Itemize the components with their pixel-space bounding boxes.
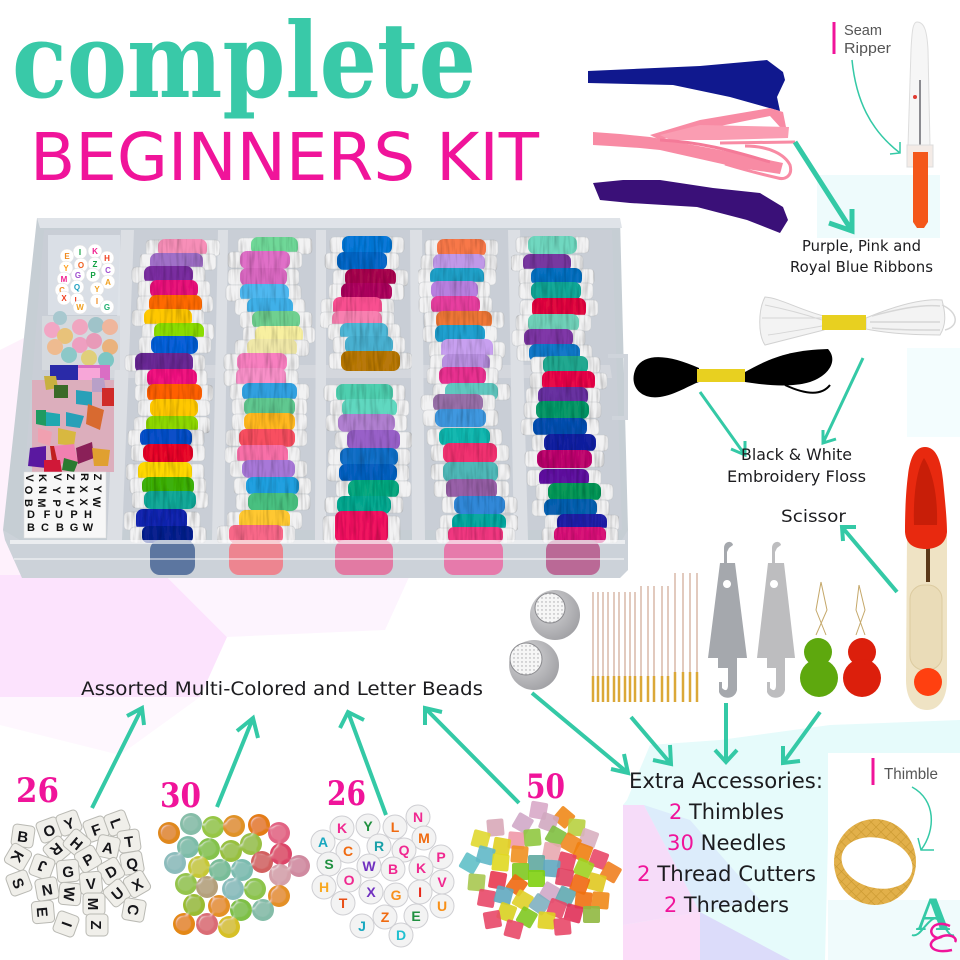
beads: black and white letter cubes: F [89,821,104,840]
letter cube beads in box: V [51,473,63,481]
beads: black and white letter cubes [3,809,152,938]
arrow: ribbons to label [795,142,852,231]
beads: black and white letter cubes: E [33,906,50,918]
beads: black and white letter cubes: Z [87,920,104,930]
ribbon: purple [593,180,788,233]
panel: gold thimble: Thimble [884,766,938,783]
title: beginners kit: BEGINNERS KIT [30,119,540,196]
arrow: seam ripper pointer [852,60,900,154]
beads: white round letter beads: P [436,849,446,865]
bag with white letter beads: A [105,278,111,287]
white embroidery floss [760,297,955,345]
bag with white letter beads: Z [93,260,98,269]
bag with white letter beads: X [61,294,67,303]
beads: white round letter beads: X [366,884,376,900]
bag with white letter beads: Y [63,264,69,273]
scissors [905,447,947,710]
bag with white letter beads: K [92,247,98,256]
silver thimbles [509,590,580,690]
beads: black and white letter cubes: P [80,850,97,870]
letter cube beads in box: F [44,509,51,521]
letter cube beads in box: V [63,499,75,507]
bag with white letter beads: W [76,303,84,312]
beads: white round letter beads: T [339,895,348,911]
letter cube beads in box: Y [91,485,103,493]
beads: iridescent pearls [158,813,310,938]
box latch [608,356,626,418]
beads: black and white letter cubes: T [123,833,135,852]
beads: white round letter beads: C [343,843,353,859]
needles [593,573,697,702]
letter cube beads in box: U [55,509,63,521]
accessories list: 2 Thimbles [669,800,784,824]
beads: white round letter beads: G [391,887,402,903]
panel: gold thimble [828,753,960,960]
letter cube beads in box [22,472,106,538]
beads: black and white letter cubes: J [36,856,49,875]
beads: white round letter beads: O [344,872,355,888]
ribbon: royal blue [588,60,785,111]
letter cube beads in box: W [83,522,94,534]
label: ribbons: Purple, Pink and [802,237,921,255]
floss column 3 [320,236,412,543]
beads: black and white letter cubes: W [59,886,78,902]
letter cube beads in box: H [64,486,76,494]
beads: black and white letter cubes: D [103,862,121,882]
bag with white letter beads: C [59,286,65,295]
letter cube beads in box: C [41,522,49,534]
beads: black and white letter cubes: X [129,875,146,895]
thread cutter 1 [708,542,747,698]
compartment dividers [107,230,612,540]
count: 26 cubes: 26 [16,771,59,811]
beads: black and white letter cubes: I [59,920,76,929]
letter cube beads in box: X [77,485,89,493]
letter cube beads in box: Z [91,474,103,481]
letter cube beads in box: O [22,486,34,495]
letter cube beads in box: D [27,509,35,521]
letter cube beads in box: W [90,497,102,508]
arrows: floss to label [700,358,863,455]
beads: black and white letter cubes: N [40,881,54,900]
logo: A [916,888,951,941]
bag with white letter beads: I [79,248,81,257]
beads: black and white letter cubes: H [66,834,86,854]
beads: white round letter beads: R [374,838,384,854]
bag with white letter beads: M [61,275,68,284]
logo [912,888,956,951]
beads: white round letter beads: W [362,858,376,874]
letter cube beads in box: K [36,474,48,482]
beads: white round letter beads: K [337,820,347,836]
letter cube beads in box: V [23,474,35,482]
bag with faceted beads and ribbon [28,365,114,472]
beads: black and white letter cubes: B [16,828,29,847]
beads: black and white letter cubes: O [41,821,58,841]
label: embroidery floss: Black & White [741,445,852,464]
bag with pearl beads [42,311,120,370]
letter cube beads in box: B [56,522,64,534]
thread cutter 2 [757,542,795,698]
ribbon: pink [593,108,795,178]
beads: white round letter beads: Q [399,842,410,858]
label: assorted beads: Assorted Multi-Colored and Letter Beads [81,678,483,700]
beads: black and white letter cubes: L [106,816,125,831]
beads: translucent faceted cubes [458,801,622,940]
floss column 4 [418,239,518,543]
title: complete: complete [12,0,476,122]
bag with white letter beads [48,235,120,315]
floss column 5 [511,236,619,543]
beads: black and white letter cubes: K [7,847,27,865]
label: seam ripper [834,22,891,57]
letter cube beads in box: G [70,522,78,534]
beads: white round letter beads: E [411,908,421,924]
label: scissor: Scissor [781,507,846,527]
storage box with floss and beads [3,218,628,578]
count: 30 pearls: 30 [160,776,201,816]
beads: white round letter beads: H [319,879,329,895]
count: 50 faceted: 50 [526,767,565,807]
beads: black and white letter cubes: Y [62,815,77,834]
accessories list: 2 Threaders [664,893,789,917]
letter cube beads in box: B [27,522,35,534]
beads: black and white letter cubes: S [8,876,27,891]
floss column 1 [124,239,220,543]
bag with white letter beads: E [64,252,70,261]
bag with white letter beads: I [96,297,98,306]
letter cube beads in box: N [36,486,48,494]
label: seam ripper: Ripper [844,40,891,57]
beads: white round letter beads: Y [363,818,373,834]
bag with white letter beads: L [75,296,80,305]
arrows: beads to label [92,708,519,815]
box front lip [3,530,628,578]
letter cube beads in box: H [84,509,92,521]
label: seam ripper: Seam [844,22,882,39]
beads: white round letter beads: I [418,884,422,900]
beads: white round letter beads [311,805,454,947]
beads: black and white letter cubes: A [101,839,115,858]
floss column 2 [217,237,315,543]
bag with white letter beads: G [104,303,110,312]
beads: black and white letter cubes: R [46,839,66,859]
letter cube beads in box: B [22,499,34,507]
box body [3,218,628,578]
label: embroidery floss [727,445,866,486]
bag with white letter beads: G [75,271,81,280]
label: embroidery floss: Embroidery Floss [727,467,866,486]
accessories list: 30 Needles [667,831,786,855]
beads: white round letter beads: D [396,927,406,943]
beads: black and white letter cubes: M [84,898,101,910]
count: 26 round letters: 26 [327,774,366,814]
bag with white letter beads: P [90,271,96,280]
letter cube beads in box: Y [50,486,62,494]
bag with white letter beads: H [104,254,110,263]
accessories list [629,769,823,917]
beads: white round letter beads: V [437,874,447,890]
letter cube beads in box: R [78,473,90,481]
beads: white round letter beads: U [437,898,447,914]
letter cube beads in box: Z [64,474,76,481]
black embroidery floss [633,349,832,397]
beads: white round letter beads: J [358,918,366,934]
beads: white round letter beads: A [318,834,328,850]
beads: white round letter beads: N [413,809,423,825]
threader green [800,582,838,697]
letter cube beads in box: M [35,498,47,508]
letter cube beads in box: P [50,499,62,507]
beads: white round letter beads: B [388,861,398,877]
arrows: accessories to label [532,693,820,773]
bag with white letter beads: C [105,266,111,275]
seam ripper tool [907,22,933,228]
letter cube beads in box: P [70,509,78,521]
label: ribbons [790,237,933,276]
threader red [843,585,881,697]
beads: white round letter beads: K [416,860,426,876]
letter cube beads in box: X [77,498,89,506]
label: ribbons: Royal Blue Ribbons [790,258,933,276]
beads: white round letter beads: L [391,819,400,835]
beads: black and white letter cubes: U [108,884,128,904]
beads: white round letter beads: S [324,856,334,872]
bag with white letter beads: Y [94,285,100,294]
accessories list: Extra Accessories: [629,769,823,793]
accessories list: 2 Thread Cutters [637,862,816,886]
arrow: scissor [842,527,897,592]
beads: black and white letter cubes: V [85,876,97,893]
beads: white round letter beads: Z [381,909,390,925]
bag with white letter beads: Q [74,283,80,292]
beads: black and white letter cubes: C [123,903,142,917]
beads: black and white letter cubes: Q [125,855,140,874]
beads: white round letter beads: M [418,830,430,846]
beads: black and white letter cubes: G [62,864,75,881]
bag with white letter beads: O [78,261,84,270]
